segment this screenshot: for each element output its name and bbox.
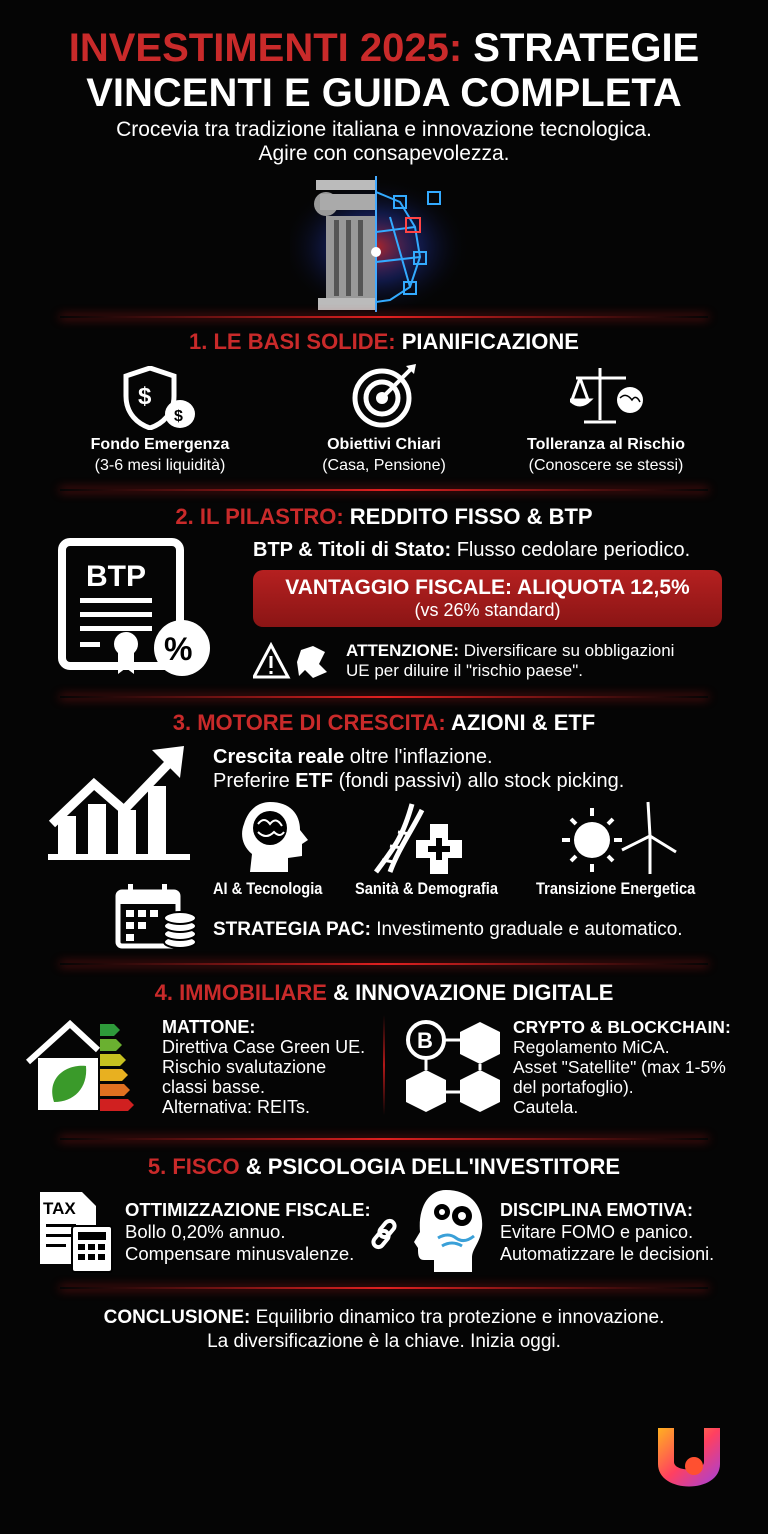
title: VINCENTI E GUIDA COMPLETA bbox=[86, 71, 682, 115]
text: crypto: Cautela. bbox=[513, 1097, 578, 1117]
text: mattone: Alternativa: REITs. bbox=[162, 1097, 310, 1117]
text: crypto bbox=[513, 1017, 731, 1117]
icon: shield money: $ bbox=[174, 408, 183, 425]
subtitle: Crocevia tra tradizione italiana e innovazione tecnologica. bbox=[116, 118, 652, 141]
label: tolleranza: Tolleranza al Rischio bbox=[527, 436, 685, 453]
text: attenzione bbox=[346, 641, 674, 680]
section 5 heading: 5. FISCO & PSICOLOGIA DELL'INVESTITORE bbox=[148, 1154, 620, 1179]
text: crypto: Asset "Satellite" (max 1-5% bbox=[513, 1057, 726, 1077]
text: attenzione: UE per diluire il "rischio paese". bbox=[346, 661, 583, 680]
icon: DNA cross bbox=[374, 803, 462, 874]
labels: sectors: AI & Tecnologia bbox=[213, 879, 322, 898]
label: obiettivi bbox=[322, 436, 446, 474]
icon: growth chart bbox=[48, 746, 190, 860]
title bbox=[69, 26, 699, 115]
text: mattone: Direttiva Case Green UE. bbox=[162, 1037, 365, 1057]
text: disciplina emotiva: Automatizzare le decisioni. bbox=[500, 1244, 714, 1264]
icon: shield money: $ bbox=[138, 383, 152, 410]
icon: blockchain bbox=[406, 1020, 500, 1112]
label: tolleranza bbox=[527, 436, 685, 474]
text: mattone: MATTONE: bbox=[162, 1017, 255, 1037]
icon: warning bbox=[253, 642, 327, 678]
icon: logo bbox=[658, 1428, 720, 1486]
icon: sun wind bbox=[562, 802, 677, 874]
text: mattone bbox=[162, 1017, 365, 1117]
label: obiettivi: (Casa, Pensione) bbox=[322, 457, 446, 474]
text: ottimizzazione fiscale: Compensare minusvalenze. bbox=[125, 1243, 354, 1264]
text: crypto: CRYPTO & BLOCKCHAIN: bbox=[513, 1017, 731, 1037]
text: ottimizzazione fiscale: Bollo 0,20% annuo. bbox=[125, 1221, 285, 1242]
label: fondo emergenza: Fondo Emergenza bbox=[91, 436, 229, 453]
icon: BTP certificate: BTP bbox=[86, 560, 146, 593]
hero icon: pillar and blockchain bbox=[298, 176, 452, 312]
text: disciplina emotiva: Evitare FOMO e panico. bbox=[500, 1222, 693, 1242]
subtitle bbox=[116, 118, 652, 165]
text: BTP: BTP & Titoli di Stato: Flusso cedolare periodico. bbox=[253, 539, 690, 561]
section 3 heading: 3. MOTORE DI CRESCITA: AZIONI & ETF bbox=[173, 710, 595, 735]
text: mattone: Rischio svalutazione bbox=[162, 1057, 326, 1077]
icon: AI head bbox=[242, 802, 308, 872]
panel: section 1 bbox=[91, 364, 685, 474]
text: PAC: STRATEGIA PAC: Investimento graduale e automatico. bbox=[213, 919, 683, 940]
text: disciplina emotiva bbox=[500, 1200, 714, 1264]
label: tolleranza: (Conoscere se stessi) bbox=[529, 457, 683, 474]
text: disciplina emotiva: DISCIPLINA EMOTIVA: bbox=[500, 1200, 693, 1220]
icon: BTP certificate bbox=[58, 538, 210, 676]
callout: vantaggio fiscale: VANTAGGIO FISCALE: ALIQUOTA 12,5% bbox=[285, 576, 690, 599]
icon: BTP certificate: % bbox=[164, 631, 192, 667]
text: Transizione Energetica bbox=[536, 879, 695, 898]
section 4 heading: 4. IMMOBILIARE & INNOVAZIONE DIGITALE bbox=[155, 980, 613, 1005]
icon: shield money bbox=[124, 366, 195, 430]
icon: target bbox=[352, 364, 416, 428]
icon: tax calculator: TAX bbox=[43, 1199, 76, 1218]
icon: tax calculator bbox=[40, 1192, 111, 1271]
text: Sanità & Demografia bbox=[355, 879, 498, 898]
icon: link bbox=[371, 1218, 397, 1250]
callout: vantaggio fiscale bbox=[253, 570, 722, 627]
icon: scale brain bbox=[570, 368, 643, 424]
title: INVESTIMENTI 2025: STRATEGIE bbox=[69, 26, 699, 70]
text: ottimizzazione fiscale: OTTIMIZZAZIONE FISCALE: bbox=[125, 1199, 371, 1220]
icon: head gears bbox=[414, 1190, 482, 1272]
text: crescita: Crescita reale oltre l'inflazione. bbox=[213, 746, 493, 768]
text: crescita: Preferire ETF (fondi passivi) allo stock picking. bbox=[213, 770, 624, 792]
conclusion: La diversificazione è la chiave. Inizia oggi. bbox=[207, 1331, 561, 1352]
subtitle: Agire con consapevolezza. bbox=[258, 142, 510, 165]
label: fondo emergenza: (3-6 mesi liquidità) bbox=[95, 457, 225, 474]
section 1 heading: 1. LE BASI SOLIDE: PIANIFICAZIONE bbox=[189, 329, 579, 354]
text: crescita bbox=[213, 746, 624, 792]
text: crypto: Regolamento MiCA. bbox=[513, 1037, 670, 1057]
conclusion bbox=[104, 1307, 664, 1352]
label: fondo emergenza bbox=[91, 436, 230, 474]
icon: green house energy bbox=[26, 1020, 134, 1111]
text: attenzione: ATTENZIONE: Diversificare su obbligazioni bbox=[346, 641, 674, 660]
text: crypto: del portafoglio). bbox=[513, 1077, 634, 1097]
conclusion: CONCLUSIONE: Equilibrio dinamico tra protezione e innovazione. bbox=[104, 1307, 664, 1328]
icon: calendar coins bbox=[116, 884, 195, 948]
callout: vantaggio fiscale: (vs 26% standard) bbox=[414, 600, 561, 620]
icon: blockchain: B bbox=[417, 1028, 433, 1053]
label: obiettivi: Obiettivi Chiari bbox=[327, 436, 441, 453]
text: ottimizzazione fiscale bbox=[125, 1199, 371, 1264]
section 2 heading: 2. IL PILASTRO: REDDITO FISSO & BTP bbox=[175, 504, 593, 529]
text: mattone: classi basse. bbox=[162, 1077, 265, 1097]
